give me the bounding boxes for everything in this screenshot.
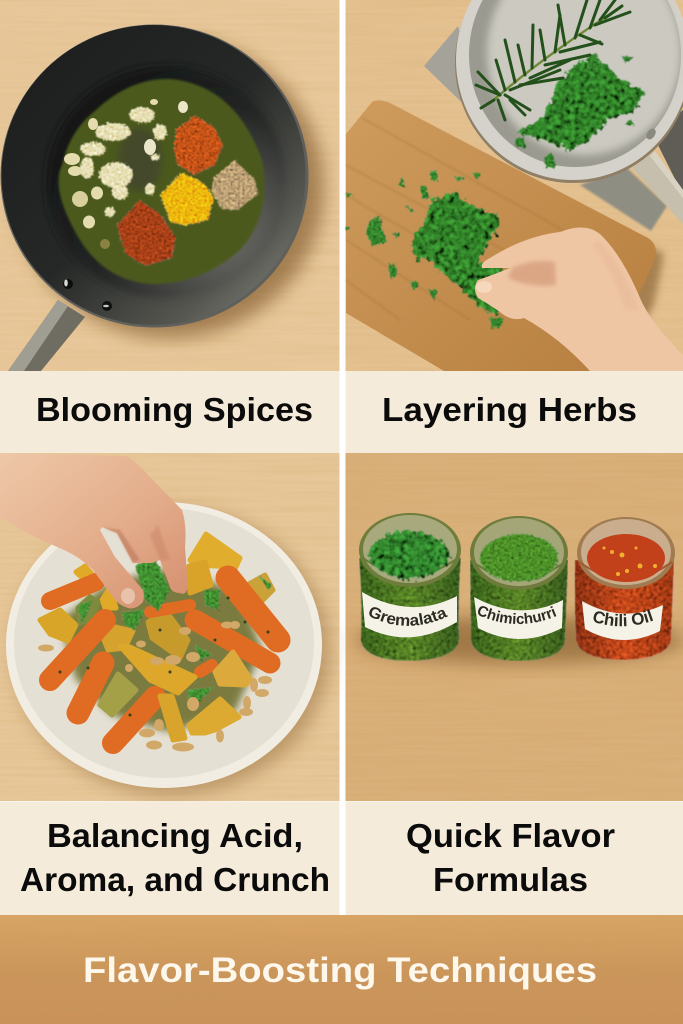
- caption: balancing acid, aroma, and crunch: [0, 802, 340, 915]
- herb specks: [58, 596, 270, 716]
- icon: hand sprinkling garnish: [0, 453, 188, 608]
- spice: orange paprika: [174, 115, 223, 175]
- panel: quick flavor formulas: [346, 453, 683, 801]
- caption: layering herbs: [346, 371, 683, 453]
- caption: quick flavor formulas: [346, 802, 683, 915]
- chopped herbs on board: [346, 170, 505, 328]
- wood background: [0, 0, 340, 371]
- jar: chimichurri: [470, 516, 568, 661]
- wood background: [0, 453, 340, 801]
- caption: balancing acid, aroma, and crunch: Aroma, and Crunch: [20, 861, 330, 898]
- jar: chimichurri: Chimichurri: [478, 606, 556, 624]
- rosemary sprig: [476, 0, 630, 120]
- food: roasted vegetables: [38, 534, 278, 752]
- icon: hand crumbling herbs: [475, 227, 683, 371]
- panel: layering herbs: [346, 0, 683, 379]
- panel: blooming spices: [0, 0, 340, 371]
- oil pool: [59, 79, 264, 284]
- spice: turmeric: [160, 172, 214, 226]
- icon: saucepan handle: [632, 151, 683, 224]
- jar shadows: [355, 616, 683, 664]
- plate shadow: [14, 509, 330, 795]
- caption: quick flavor formulas: Quick Flavor: [406, 817, 615, 854]
- jar: gremolata: [359, 513, 461, 661]
- grey centre of pan: [118, 128, 162, 192]
- icon: saucepan: [455, 0, 683, 183]
- pine nuts: [38, 621, 272, 752]
- icon: pan handle: [8, 300, 85, 371]
- label: [474, 597, 563, 639]
- panel: balancing acid, aroma and crunch: [0, 453, 340, 801]
- golden potatoes: [40, 534, 273, 715]
- label: [362, 592, 457, 637]
- wood background: [346, 453, 683, 801]
- grey cloth: [424, 26, 683, 231]
- wood background: [346, 0, 683, 371]
- jar: chili oil: Chili Oil: [594, 609, 653, 626]
- board shadow: [354, 109, 664, 379]
- footer banner with title: [0, 915, 683, 1024]
- jar: gremolata: Gremalata: [369, 607, 448, 626]
- icon: frying pan: [0, 24, 308, 328]
- carrots: [50, 578, 278, 743]
- caption: balancing acid, aroma, and crunch: Balancing Acid,: [47, 817, 303, 854]
- icon: white plate: [6, 502, 322, 788]
- chopped garlic: [64, 99, 188, 249]
- herbs: [78, 558, 272, 708]
- label: [582, 601, 663, 640]
- caption: blooming spices: Blooming Spices: [36, 391, 313, 428]
- caption: blooming spices: [0, 371, 340, 453]
- icon: pan shadow: [16, 38, 324, 338]
- spice: dark chili powder: [117, 200, 176, 266]
- food base: [60, 568, 262, 732]
- title: Flavor-Boosting Techniques: [83, 951, 597, 990]
- spice: ground cumin: [212, 160, 258, 210]
- jar: chili oil: [574, 517, 675, 660]
- caption: quick flavor formulas: Formulas: [433, 861, 588, 898]
- potatoes over carrots: [120, 646, 251, 740]
- caption: layering herbs: Layering Herbs: [382, 391, 637, 428]
- cutting board: [346, 100, 656, 371]
- chopped herbs in pan: [515, 52, 647, 168]
